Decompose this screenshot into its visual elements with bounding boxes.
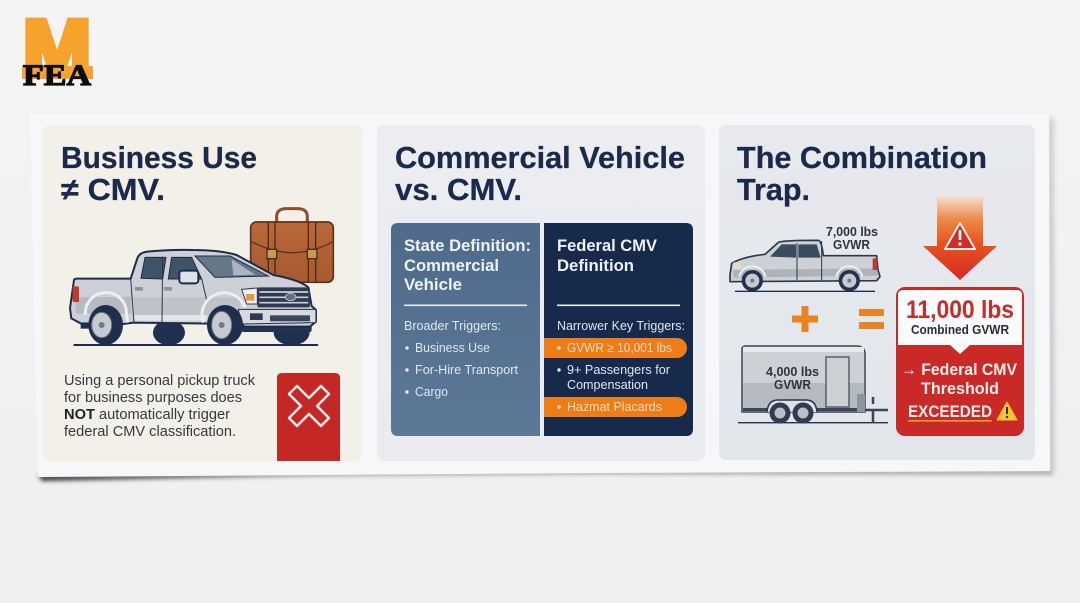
highlight: hazmat [544,397,687,417]
heading: commercial vehicle [395,140,685,207]
panel: commercial vehicle vs cmv [377,125,705,461]
federal heading: Federal CMV [557,237,657,255]
callout: combined gvwr exceeded: EXCEEDED [908,402,992,421]
state heading: State Definition: [404,237,531,255]
label: truck gvwr: GVWR [833,238,870,252]
logo: MFEA: M [23,3,91,92]
heading: commercial vehicle: vs. CMV. [395,172,522,207]
column: state definition [391,223,540,436]
paper sheet [30,113,1054,481]
label: truck gvwr: 7,000 lbs [826,225,878,239]
column: federal definition [544,223,693,436]
state triggers list: Business Use [415,341,490,355]
label: trailer gvwr: 4,000 lbs [766,365,819,379]
arrow: down warning arrow [923,195,997,280]
text: explanation: for business purposes does [64,390,242,406]
federal triggers list: 9+ Passengers for [567,363,670,377]
callout: combined gvwr exceeded: Threshold [921,379,999,398]
state triggers list: Cargo [415,385,448,399]
panel: business use [43,125,362,461]
federal triggers list [544,319,687,417]
federal heading: Definition [557,257,634,275]
label: trailer gvwr [766,365,819,392]
icon: red x tab [277,373,340,461]
panel: combination trap [719,125,1035,460]
callout: combined gvwr exceeded: → Federal CMV [901,360,1018,379]
label: truck gvwr [826,225,878,252]
state heading: Commercial [404,257,499,275]
icon: warning triangle [945,223,975,249]
heading: combination trap: The Combination [737,140,987,175]
callout: combined gvwr exceeded [896,287,1024,436]
text: explanation: Using a personal pickup truck [64,373,256,389]
logo: MFEA: FEA [23,59,91,92]
heading: business use [61,140,257,207]
state triggers list [404,319,519,399]
heading: combination trap [737,140,987,207]
federal triggers list: Compensation [567,378,648,392]
text: explanation: federal CMV classification. [64,424,236,440]
federal triggers list: Narrower Key Triggers: [557,319,685,333]
callout: combined gvwr exceeded: 11,000 lbs [906,296,1014,324]
callout: combined gvwr exceeded: Combined GVWR [911,322,1010,337]
highlight: gvwr [544,338,687,358]
icon: equals [859,309,884,329]
heading: business use: ≠ CMV. [61,172,165,207]
heading: commercial vehicle: Commercial Vehicle [395,140,685,175]
illustration: pickup truck front three-quarter [70,250,318,346]
text: explanation [64,373,256,440]
highlight: hazmat: Hazmat Placards [567,400,662,414]
state triggers list: Broader Triggers: [404,319,501,333]
icon: briefcase [251,209,333,282]
heading: combination trap: Trap. [737,172,810,207]
text: explanation: NOT automatically trigger [64,407,230,423]
state heading [404,237,531,294]
federal heading [557,237,657,275]
state triggers list: For-Hire Transport [415,363,519,377]
label: trailer gvwr: GVWR [774,378,811,392]
highlight: gvwr: GVWR ≥ 10,001 lbs [567,341,672,355]
state heading: Vehicle [404,276,462,294]
illustration: pickup truck side view [730,240,880,292]
icon: yellow warning [997,402,1017,420]
illustration: cargo trailer [738,346,888,424]
icon: plus [792,306,818,332]
heading: business use: Business Use [61,140,257,175]
